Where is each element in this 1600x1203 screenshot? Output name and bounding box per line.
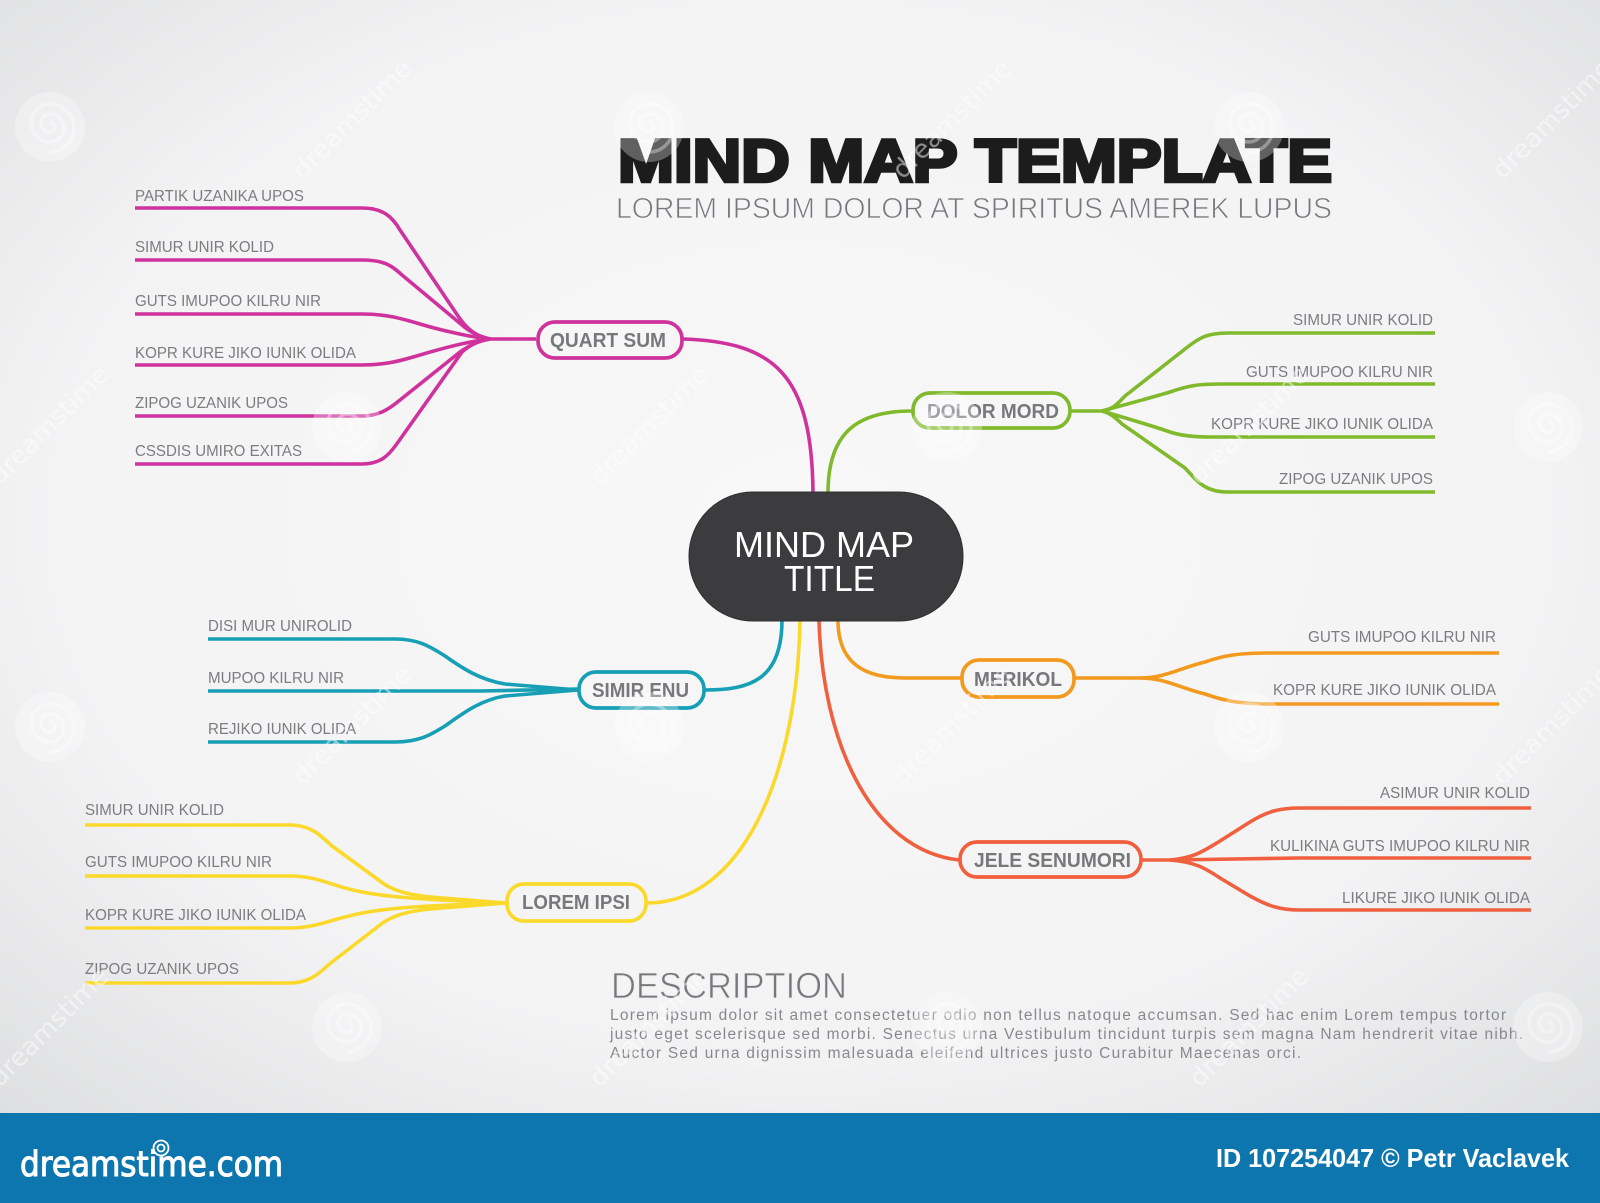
watermark overlay: dreamstime xyxy=(584,360,715,491)
subtitle: LOREM IPSUM DOLOR AT SPIRITUS AMEREK LUPUS xyxy=(616,193,1332,225)
center node: mind map title: TITLE xyxy=(784,558,875,599)
node: dolor mord xyxy=(913,393,1070,428)
center node: mind map title xyxy=(689,492,963,621)
branch: quart sum (magenta) xyxy=(135,188,813,493)
labels: simir enu: DISI MUR UNIROLID xyxy=(208,618,352,635)
node: merikol: MERIKOL xyxy=(974,669,1062,691)
labels: quart sum: PARTIK UZANIKA UPOS xyxy=(135,188,304,205)
footer logo text: dreamstime.com xyxy=(20,1145,283,1185)
watermark overlay: dreamstime xyxy=(887,660,1018,791)
description body: Auctor Sed urna dignissim malesuada eleifend ultrices justo Curabitur Maecenas orci. xyxy=(610,1045,1301,1062)
center node: mind map title: MIND MAP xyxy=(734,524,914,565)
branch: jele senumori (red) xyxy=(819,620,1531,910)
description body xyxy=(609,1007,1523,1062)
description body: justo eget scelerisque sed morbi. Senectus urna Vestibulum tincidunt turpis sem magna Nam hendrerit vitae nibh. xyxy=(609,1026,1523,1043)
watermark overlay: dreamstime xyxy=(584,962,715,1093)
labels: jele senumori xyxy=(1270,785,1530,907)
labels: quart sum: CSSDIS UMIRO EXITAS xyxy=(135,443,302,460)
labels: lorem ipsi xyxy=(85,802,306,978)
labels: simir enu: REJIKO IUNIK OLIDA xyxy=(208,721,356,738)
node: jele senumori: JELE SENUMORI xyxy=(974,850,1131,872)
labels: dolor mord: SIMUR UNIR KOLID xyxy=(1293,312,1433,329)
connector: center to merikol xyxy=(838,620,961,678)
labels: lorem ipsi: GUTS IMUPOO KILRU NIR xyxy=(85,854,272,871)
node: quart sum: QUART SUM xyxy=(550,330,666,352)
branch: simir enu (teal) xyxy=(208,618,782,742)
watermark overlay: dreamstime xyxy=(1184,962,1315,1093)
labels: merikol xyxy=(1273,629,1496,699)
branch: merikol (orange) xyxy=(838,620,1499,704)
labels: simir enu: MUPOO KILRU NIR xyxy=(208,670,344,687)
branch lines: jele senumori xyxy=(1142,808,1531,910)
connector: center to simir enu xyxy=(705,620,782,690)
branch lines: merikol xyxy=(1075,653,1499,704)
branch: dolor mord (green) xyxy=(828,312,1435,493)
labels: quart sum: KOPR KURE JIKO IUNIK OLIDA xyxy=(135,345,356,362)
watermark overlay: dreamstime xyxy=(887,54,1018,185)
labels: merikol: KOPR KURE JIKO IUNIK OLIDA xyxy=(1273,682,1496,699)
watermark overlay: dreamstime xyxy=(1184,360,1315,491)
watermark overlay: dreamstime xyxy=(287,54,418,185)
branch: lorem ipsi (yellow) xyxy=(85,620,800,983)
labels: dolor mord: KOPR KURE JIKO IUNIK OLIDA xyxy=(1211,416,1433,433)
branch lines: dolor mord xyxy=(1071,333,1435,492)
description body: Lorem ipsum dolor sit amet consectetuer odio non tellus natoque accumsan. Sed hac enim Lorem tempus tortor xyxy=(610,1007,1506,1024)
labels: quart sum: SIMUR UNIR KOLID xyxy=(135,239,274,256)
description heading: DESCRIPTION xyxy=(611,965,847,1006)
connector: center to lorem ipsi xyxy=(647,620,800,903)
node: jele senumori xyxy=(960,842,1141,877)
connector: center to dolor mord xyxy=(828,411,912,493)
connector: center to jele senumori xyxy=(819,620,959,860)
labels: dolor mord xyxy=(1211,312,1433,488)
branch lines: quart sum xyxy=(135,208,536,464)
labels: lorem ipsi: SIMUR UNIR KOLID xyxy=(85,802,224,819)
labels: lorem ipsi: KOPR KURE JIKO IUNIK OLIDA xyxy=(85,907,306,924)
labels: dolor mord: ZIPOG UZANIK UPOS xyxy=(1279,471,1433,488)
node: dolor mord: DOLOR MORD xyxy=(927,401,1059,423)
labels: jele senumori: ASIMUR UNIR KOLID xyxy=(1380,785,1530,802)
labels: quart sum: GUTS IMUPOO KILRU NIR xyxy=(135,293,321,310)
labels: simir enu xyxy=(208,618,356,738)
watermark overlay: dreamstime xyxy=(287,660,418,791)
icon: footer logo swirl xyxy=(154,1140,168,1156)
footer credit: ID 107254047 © Petr Vaclavek xyxy=(1216,1143,1570,1173)
node: simir enu: SIMIR ENU xyxy=(592,680,689,702)
labels: jele senumori: LIKURE JIKO IUNIK OLIDA xyxy=(1342,890,1530,907)
labels: dolor mord: GUTS IMUPOO KILRU NIR xyxy=(1246,364,1433,381)
title: MIND MAP TEMPLATE xyxy=(618,128,1332,194)
node: merikol xyxy=(962,660,1074,697)
labels: jele senumori: KULIKINA GUTS IMUPOO KILRU NIR xyxy=(1270,838,1530,855)
node: lorem ipsi xyxy=(507,884,646,921)
branch lines: simir enu xyxy=(208,639,578,742)
labels: lorem ipsi: ZIPOG UZANIK UPOS xyxy=(85,961,239,978)
node: simir enu xyxy=(579,672,704,708)
branch lines: lorem ipsi xyxy=(85,825,506,983)
node: quart sum xyxy=(538,322,682,358)
labels: quart sum xyxy=(135,188,356,460)
node: lorem ipsi: LOREM IPSI xyxy=(522,892,630,914)
labels: merikol: GUTS IMUPOO KILRU NIR xyxy=(1308,629,1496,646)
footer banner xyxy=(0,1113,1600,1203)
connector: center to quart sum xyxy=(683,339,813,493)
labels: quart sum: ZIPOG UZANIK UPOS xyxy=(135,395,288,412)
